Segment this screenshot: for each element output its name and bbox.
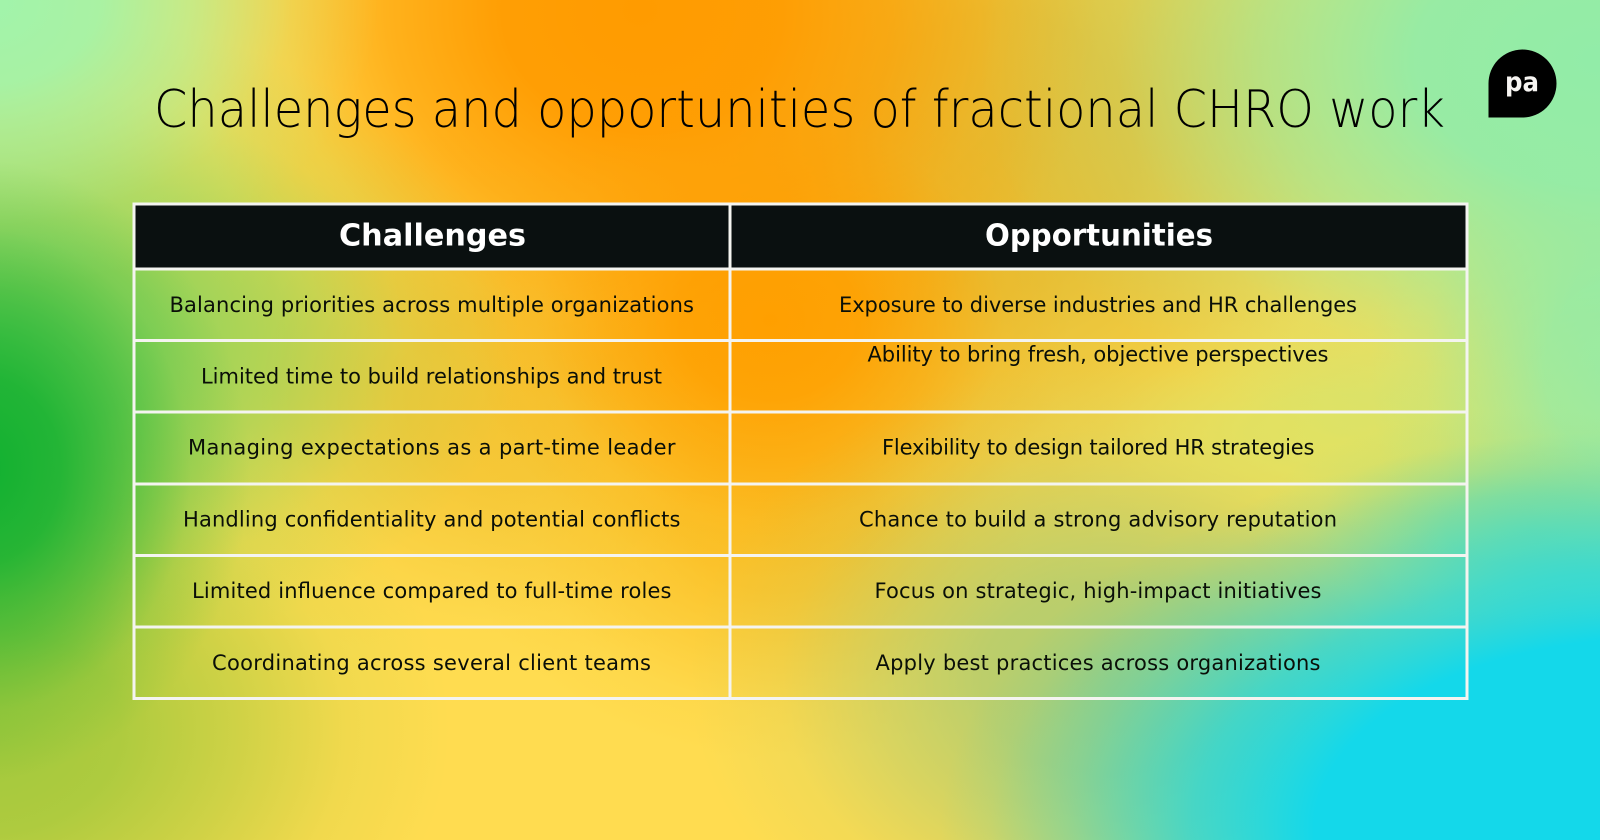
header row (134, 204, 1467, 269)
challenge 2: Limited time to build relationships and trust (201, 364, 662, 388)
challenge 4: Handling confidentiality and potential conflicts (183, 508, 680, 532)
opportunity 4: Chance to build a strong advisory reputation (859, 508, 1337, 532)
opportunity 5: Focus on strategic, high-impact initiatives (874, 579, 1322, 603)
challenges column (170, 293, 694, 675)
header: Opportunities: Opportunities (985, 218, 1213, 254)
table (134, 204, 1467, 698)
title: Challenges and opportunities of fractional CHRO work (154, 80, 1445, 140)
challenge 5: Limited influence compared to full-time roles (192, 579, 672, 603)
opportunity 6: Apply best practices across organizations (876, 651, 1320, 675)
opportunity 3: Flexibility to design tailored HR strategies (882, 436, 1314, 460)
challenge 6: Coordinating across several client teams (212, 651, 651, 675)
challenge 3: Managing expectations as a part-time leader (188, 436, 676, 460)
challenge 1: Balancing priorities across multiple organizations (170, 293, 694, 317)
table grid lines (134, 204, 1467, 698)
header: Challenges: Challenges (339, 218, 526, 254)
logo: pa speech drop (1488, 50, 1556, 118)
logo: pa speech drop: pa (1505, 67, 1539, 98)
opportunity 2: Ability to bring fresh, objective perspectives (868, 342, 1328, 366)
opportunity 1: Exposure to diverse industries and HR challenges (839, 293, 1357, 317)
opportunities column (839, 293, 1357, 675)
